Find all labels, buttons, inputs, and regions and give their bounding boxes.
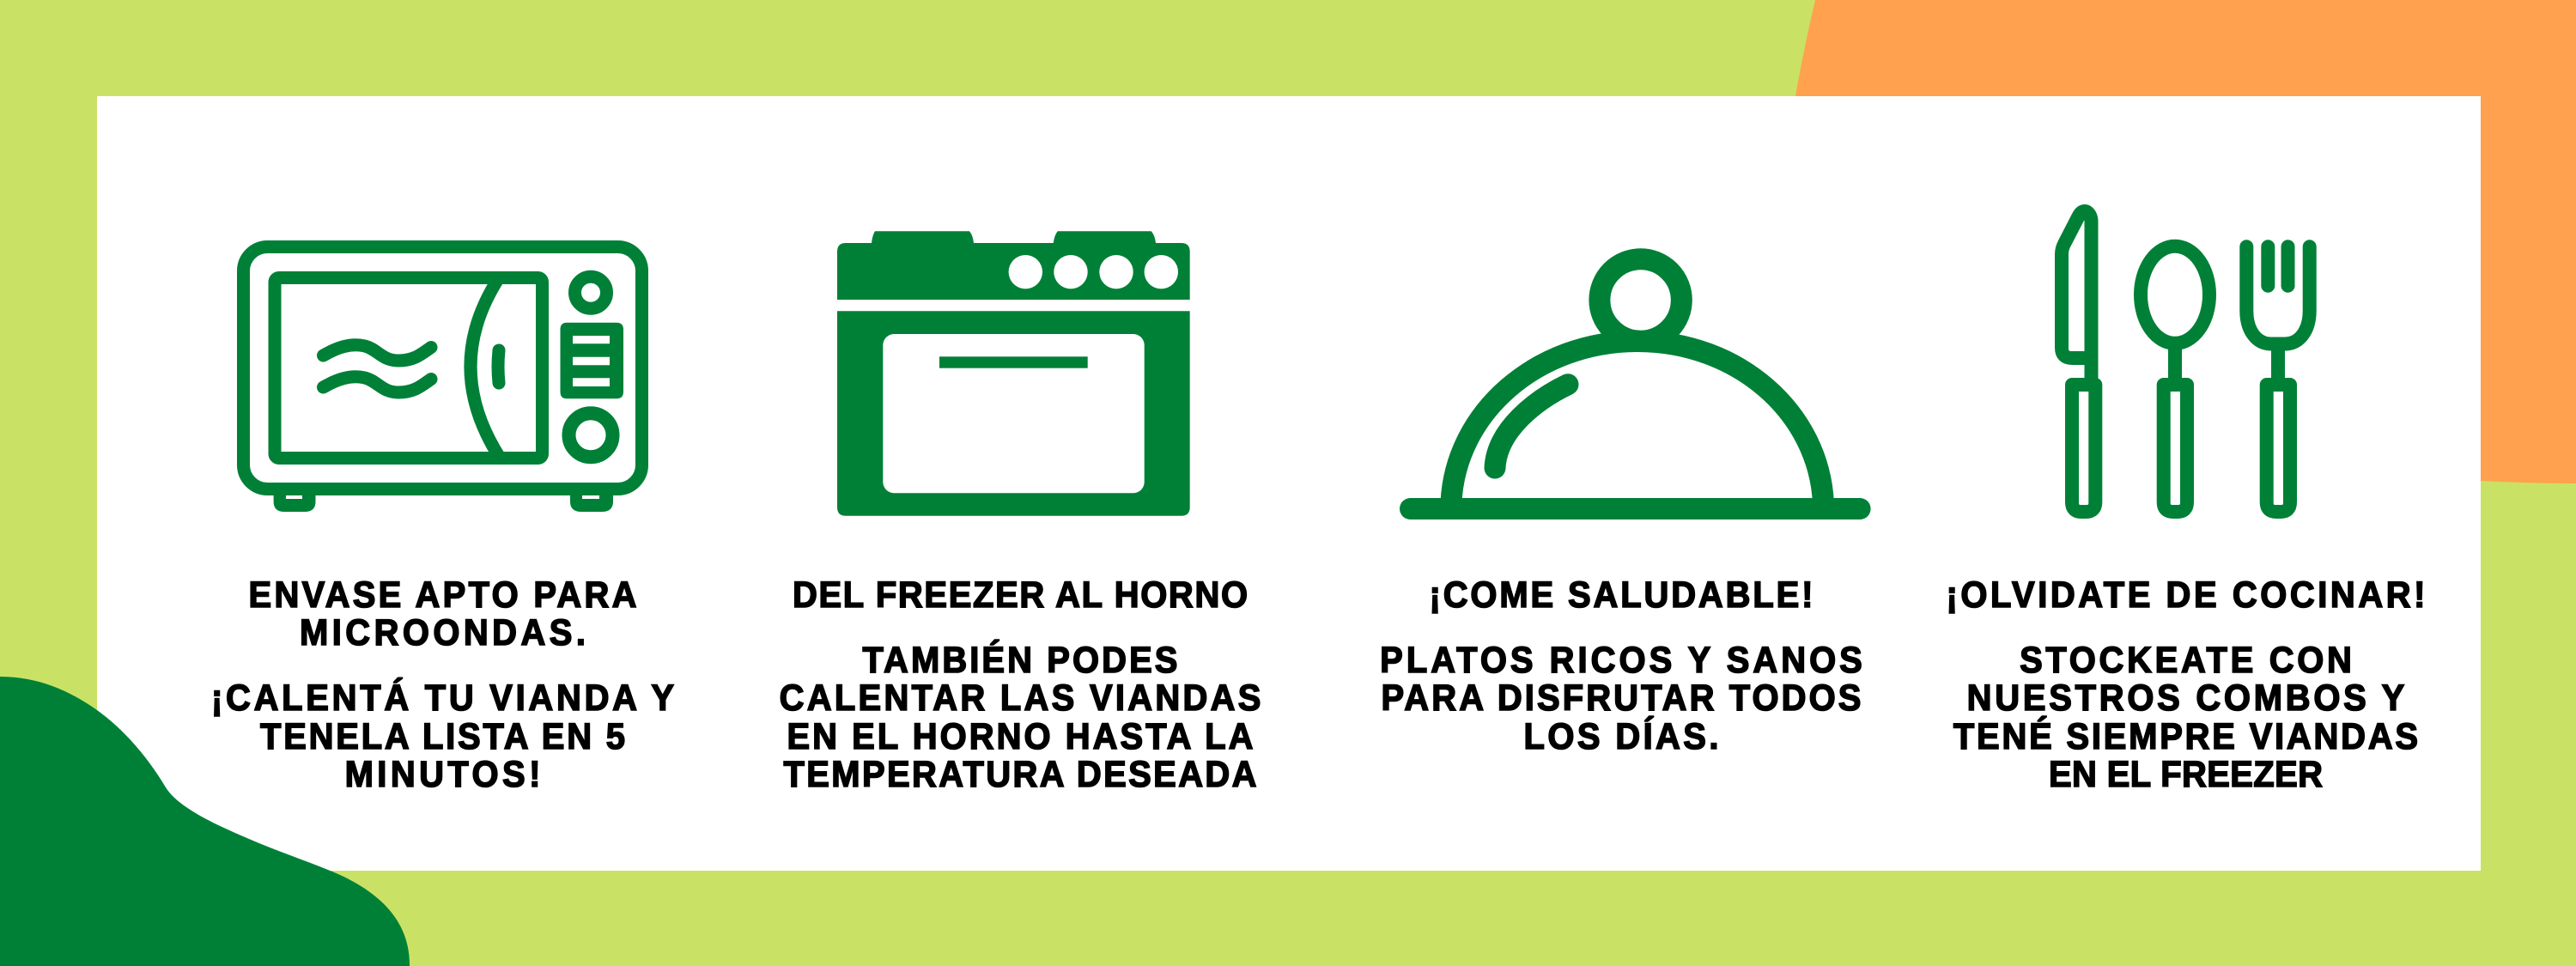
text block: oven: TEMPERATURA DESEADA bbox=[783, 753, 1257, 794]
microwave door bbox=[275, 278, 543, 459]
dark green blob bottom left bbox=[0, 677, 410, 966]
oven top panel bbox=[837, 231, 1190, 300]
fork handle bbox=[2267, 385, 2290, 512]
text block: oven: CALENTAR LAS VIANDAS bbox=[780, 677, 1261, 718]
oven window bbox=[883, 334, 1145, 493]
knife blade bbox=[2062, 211, 2092, 380]
knife handle bbox=[2072, 385, 2095, 512]
microwave body bbox=[244, 247, 642, 489]
text block: microwave: ¡CALENTÁ TU VIANDA Y bbox=[211, 677, 674, 718]
cloche dome bbox=[1451, 342, 1823, 502]
cloche highlight bbox=[1495, 385, 1568, 468]
text block: oven: EN EL HORNO HASTA LA bbox=[787, 715, 1254, 756]
icon: food cloche bbox=[1400, 259, 1871, 519]
top knob bbox=[575, 276, 606, 308]
microwave waves bbox=[323, 345, 431, 392]
oven bar bbox=[939, 356, 1088, 368]
text block: forget cooking: TENÉ SIEMPRE VIANDAS bbox=[1953, 715, 2418, 756]
text block: healthy bbox=[1380, 574, 1862, 756]
spoon stem bbox=[2168, 343, 2182, 380]
orange blob top right bbox=[1786, 0, 2576, 483]
cloche plate bbox=[1400, 498, 1871, 519]
door arc bbox=[471, 278, 500, 458]
icon: cutlery bbox=[2062, 211, 2310, 512]
fork stem bbox=[2271, 343, 2285, 380]
text block: microwave: MINUTOS! bbox=[345, 753, 540, 794]
fork middle tines bbox=[2268, 246, 2287, 286]
control panel bbox=[560, 323, 623, 398]
oven dials bbox=[1009, 255, 1178, 289]
text block: healthy: PLATOS RICOS Y SANOS bbox=[1380, 639, 1862, 680]
text block: microwave: ENVASE APTO PARA bbox=[249, 574, 636, 615]
white panel bbox=[97, 96, 2481, 871]
door handle bbox=[498, 350, 499, 383]
icon: oven bbox=[837, 231, 1190, 516]
text block: forget cooking: NUESTROS COMBOS Y bbox=[1967, 677, 2405, 718]
text block: forget cooking: STOCKEATE CON bbox=[2020, 639, 2352, 680]
text block: forget cooking bbox=[1946, 574, 2425, 794]
text block: oven bbox=[780, 574, 1261, 794]
microwave feet bbox=[274, 495, 613, 512]
text block: oven: TAMBIÉN PODES bbox=[863, 639, 1177, 680]
text block: healthy: ¡COME SALUDABLE! bbox=[1430, 574, 1813, 615]
text block: microwave bbox=[211, 574, 674, 794]
fork head bbox=[2246, 246, 2310, 343]
icon: microwave bbox=[244, 247, 642, 512]
spoon handle bbox=[2164, 385, 2187, 512]
text block: healthy: PARA DISFRUTAR TODOS bbox=[1382, 677, 1861, 718]
bottom knob bbox=[568, 413, 613, 457]
cloche knob bbox=[1600, 259, 1681, 341]
text block: forget cooking: ¡OLVIDATE DE COCINAR! bbox=[1946, 574, 2426, 615]
text block: microwave: MICROONDAS. bbox=[300, 611, 586, 653]
oven body bbox=[837, 311, 1190, 516]
text block: oven: DEL FREEZER AL HORNO bbox=[793, 574, 1248, 615]
text block: microwave: TENELA LISTA EN 5 bbox=[260, 715, 625, 756]
text block: healthy: LOS DÍAS. bbox=[1524, 715, 1718, 756]
text block: forget cooking: EN EL FREEZER bbox=[2049, 753, 2323, 794]
spoon bowl bbox=[2141, 246, 2209, 343]
